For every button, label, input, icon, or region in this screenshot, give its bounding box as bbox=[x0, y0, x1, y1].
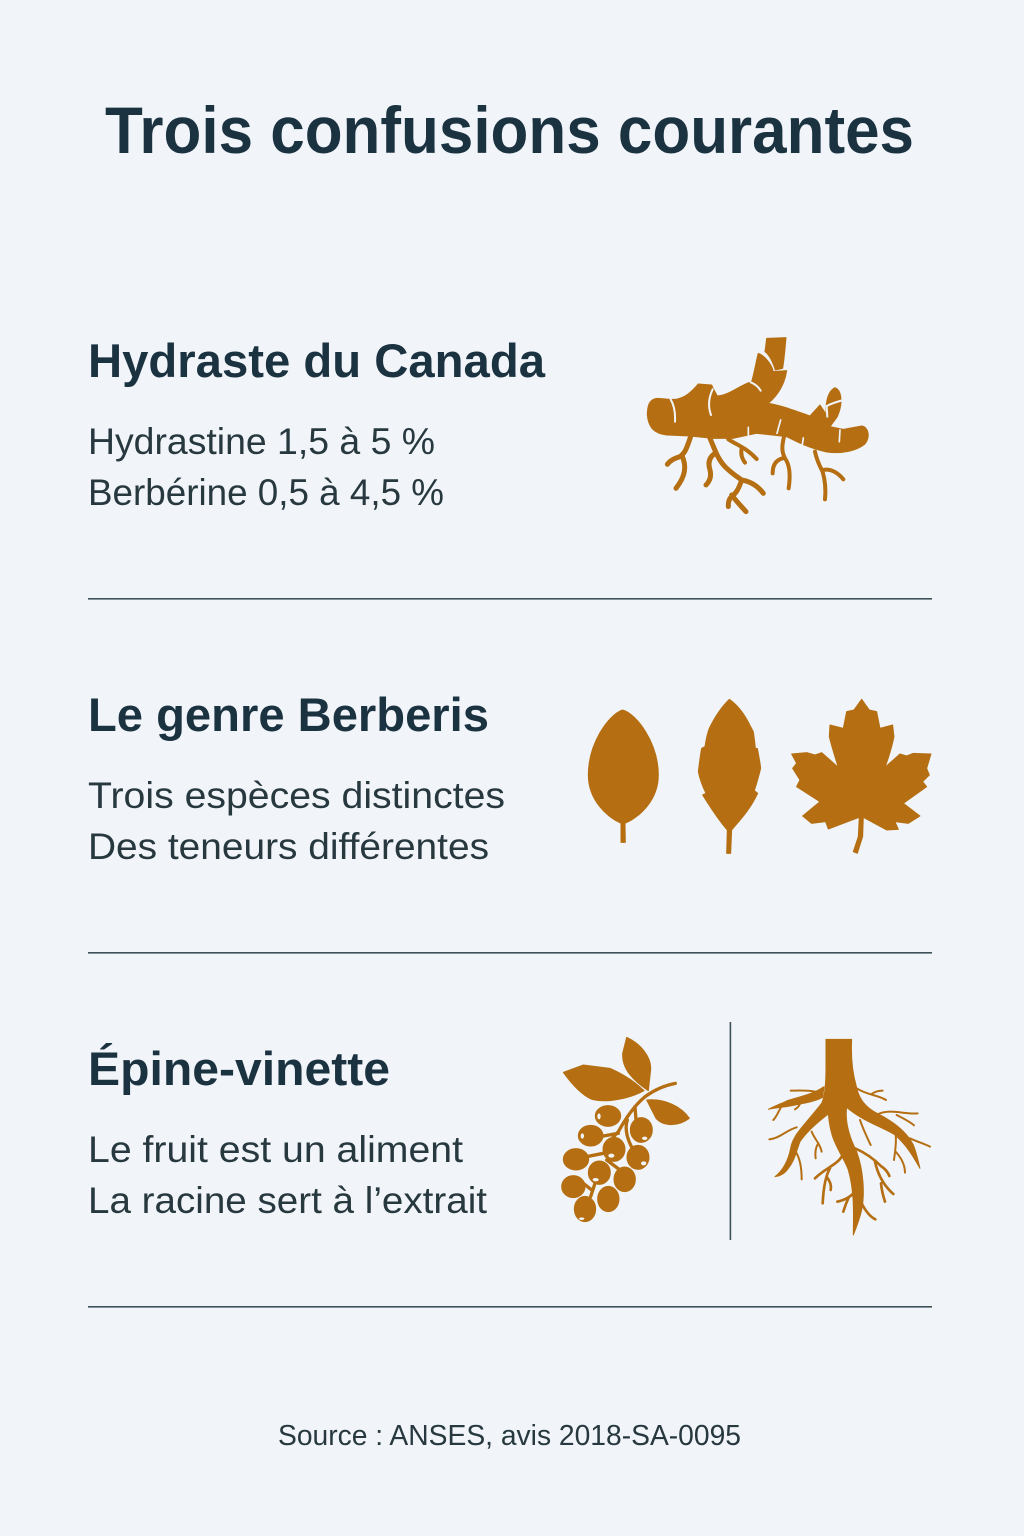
divider bbox=[88, 598, 932, 600]
icons: three leaves bbox=[588, 699, 931, 853]
text block: Épine-vinette description: La racine sert à l’extrait bbox=[88, 1180, 488, 1221]
panel: Le genre Berberis bbox=[88, 688, 931, 867]
text block: Épine-vinette description bbox=[88, 1129, 488, 1221]
heading: Le genre Berberis: Le genre Berberis bbox=[88, 688, 489, 741]
icon: maple leaf bbox=[792, 699, 931, 853]
vertical divider bbox=[730, 1022, 731, 1240]
panel: Hydraste du Canada bbox=[88, 334, 868, 513]
source note: Source : ANSES, avis 2018-SA-0095 bbox=[278, 1420, 741, 1452]
text block: Berberis description bbox=[88, 775, 505, 867]
icon: serrated leaf bbox=[698, 699, 761, 853]
icon: oval leaf bbox=[588, 710, 658, 842]
text block: Épine-vinette description: Le fruit est un aliment bbox=[88, 1129, 464, 1170]
icon: rhizome with roots bbox=[647, 338, 868, 512]
divider bbox=[88, 1306, 932, 1308]
divider bbox=[88, 952, 932, 954]
text block: Berberis description: Trois espèces distinctes bbox=[88, 775, 505, 816]
panel: Épine-vinette bbox=[88, 1022, 930, 1240]
text block: Hydraste contents: Hydrastine 1,5 à 5 % bbox=[88, 421, 435, 462]
icon: berry cluster with leaves bbox=[562, 1037, 689, 1222]
title: Trois confusions courantes bbox=[105, 93, 914, 167]
text block: Hydraste contents: Berbérine 0,5 à 4,5 % bbox=[88, 472, 444, 513]
text block: Hydraste contents bbox=[88, 421, 444, 513]
text block: Berberis description: Des teneurs différentes bbox=[88, 826, 489, 867]
heading: Hydraste du Canada: Hydraste du Canada bbox=[88, 334, 546, 387]
icon: taproot bbox=[768, 1039, 930, 1235]
heading: Épine-vinette: Épine-vinette bbox=[88, 1042, 390, 1095]
